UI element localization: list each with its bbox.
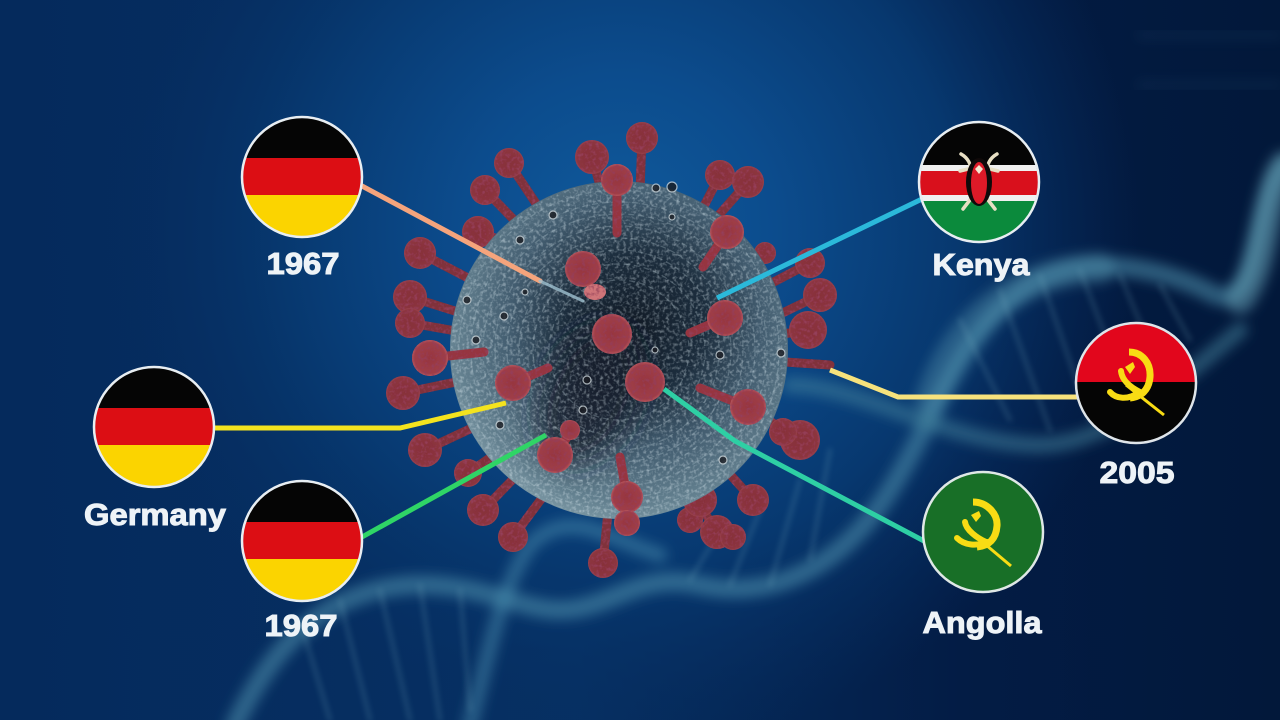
flag: Germany top xyxy=(240,115,364,240)
front spikes xyxy=(412,164,766,536)
flag: Kenya xyxy=(917,120,1041,245)
coronavirus particle xyxy=(386,122,837,578)
flag: Angola red and black xyxy=(1074,321,1198,446)
label: Kenya: Kenya xyxy=(932,247,1030,282)
flag: Angola green xyxy=(923,472,1043,592)
connector: pale yellow line to 2005 Angola flag xyxy=(830,370,1078,397)
flag: Germany lower xyxy=(240,479,364,604)
icon: Angola emblem xyxy=(1110,352,1164,415)
label: 2005: 2005 xyxy=(1100,455,1174,490)
connector: yellow line to Germany flag xyxy=(214,403,506,428)
label: 1967 top: 1967 xyxy=(266,246,340,281)
label: Angolla: Angolla xyxy=(922,605,1042,640)
connector: teal line to Angola flag xyxy=(664,389,924,541)
label: 1967 lower: 1967 xyxy=(264,608,338,643)
flag: Germany left xyxy=(92,365,216,490)
connector: cyan line to Kenya flag xyxy=(717,199,922,298)
rear spikes xyxy=(386,122,837,578)
label: Germany: Germany xyxy=(84,497,227,532)
icon: Angola emblem on green xyxy=(957,502,1011,566)
virus body xyxy=(450,181,788,519)
DNA helix backdrop xyxy=(235,35,1280,720)
connector: orange line to top Germany flag xyxy=(362,186,583,301)
connector: green line to lower 1967 flag xyxy=(362,435,546,537)
